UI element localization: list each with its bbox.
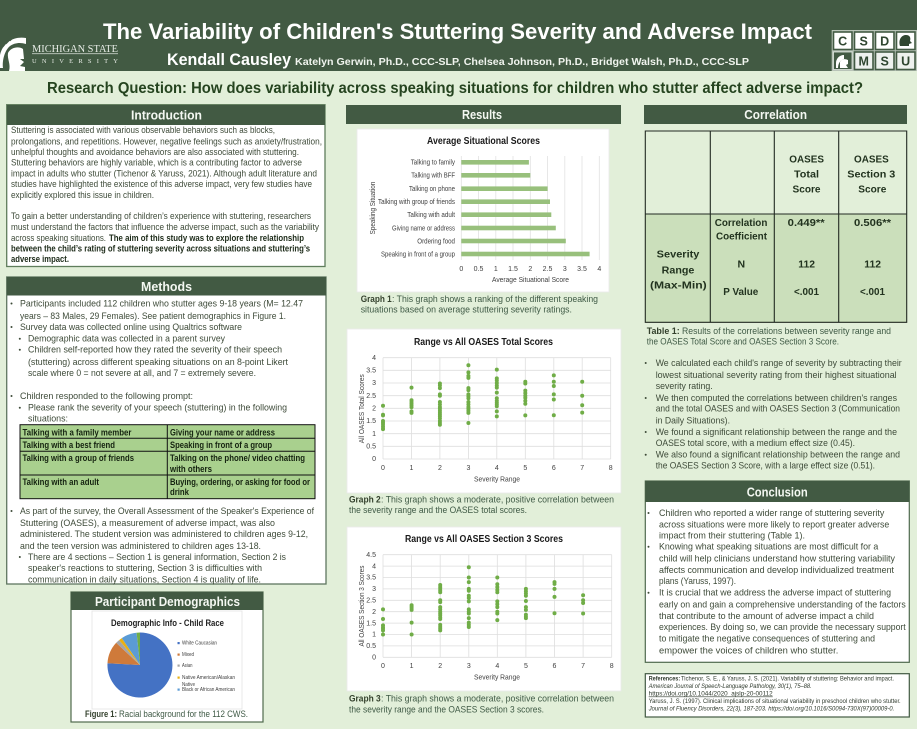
text block: conclusion bullets: Knowing what speaking situations are most difficult for a (659, 541, 879, 552)
logo: CSD MSU blocks: M (858, 54, 869, 68)
panel: references: Journal of Fluency Disorders, 22(3), 187-203. https://doi.org/10.1016/S0094-730X(97)00009-0. (648, 706, 894, 712)
scatter chart: range vs OASES section 3: 3 (372, 586, 376, 593)
pie legend: Native (182, 682, 195, 688)
panel: conclusion (645, 481, 909, 662)
text block: OASES description: There are 4 sections – Section 1 is general information, Section 2 is (28, 551, 286, 562)
text block: introduction body: To gain a better understanding of children’s experience with stuttering, researchers (11, 210, 311, 221)
text block: participants and survey (10, 298, 303, 424)
table: speaking situations: Talking with a family member (22, 427, 132, 437)
lead author: Kendall Causley (167, 50, 292, 69)
text block: introduction body: studies have highlighted the existence of this adverse impact, very few studies have (11, 178, 312, 189)
bar chart: average situational scores: 2.5 (543, 266, 552, 273)
heading: participant demographics: Participant Demographics (95, 595, 240, 609)
text block: introduction body: prolongations, and repetitions. However, negative feelings such as anxiety/frustration, (11, 135, 322, 146)
text block: correlation findings: the OASES Section 3 Score, with a large effect size (0.51). (656, 460, 875, 471)
scatter chart: range vs OASES section 3: Severity Range (474, 675, 520, 682)
pie legend: Black or African American (182, 687, 235, 693)
table: speaking situations: Talking with an adult (22, 477, 99, 487)
scatter chart: range vs OASES section 3: 5 (524, 663, 528, 670)
text block: conclusion bullets: child will help clinicians understand how stuttering variability (659, 553, 895, 564)
text block: introduction body: explicitly explored this issue in children. (11, 189, 154, 200)
table: speaking situations: with others (169, 464, 212, 474)
text block: participants and survey: Survey data was collected online using Qualtrics software (20, 321, 242, 332)
scatter chart: range vs OASES section 3: 0.5 (366, 643, 376, 650)
caption: figure 1: Racial background for the 112 CWS. (119, 708, 248, 719)
logo: CSD MSU blocks: C (838, 34, 847, 48)
scatter chart: range vs OASES section 3: All OASES Section 3 Scores (359, 565, 366, 646)
text block: conclusion bullets: impact from their stuttering (Table 1). (659, 529, 805, 540)
text block: correlation findings: We calculated each child's range of severity by subtracting their (656, 357, 902, 368)
scatter chart: range vs OASES section 3: 3.5 (366, 575, 376, 582)
scatter chart: range vs OASES section 3: 1 (410, 663, 414, 670)
table: speaking situations: Talking with a best friend (22, 440, 115, 450)
caption: graph 1: situations based on average stuttering severity ratings. (361, 304, 572, 315)
scatter chart: range vs OASES total: 6 (552, 465, 556, 472)
pie chart: child race (92, 611, 242, 709)
text block: conclusion bullets: affects communication and develop individualized treatment (659, 564, 894, 575)
text block: conclusion bullets: across situations were more likely to report greater adverse (659, 518, 889, 529)
text block: OASES description: As part of the survey, the Overall Assessment of the Speaker's Experience of (20, 505, 314, 516)
scatter chart: range vs OASES section 3: 2 (372, 609, 376, 616)
table: correlation results: <.001 (860, 286, 885, 298)
scatter chart: range vs OASES total: 8 (609, 465, 613, 472)
scatter chart: range vs OASES total: 4 (495, 465, 499, 472)
pie legend: Asian (182, 663, 193, 669)
heading: results: Results (462, 107, 502, 122)
logo: CSD MSU blocks: S (881, 54, 889, 68)
text block: correlation findings: We also found a significant relationship between the range and (656, 449, 900, 460)
scatter chart: range vs OASES section 3 (347, 527, 621, 691)
text block: participants and survey: Participants included 112 children who stutter ages 9-18 years (M= 12.47 (20, 298, 303, 309)
text block: participants and survey: years – 83 Males, 29 Females). See patient demographics in Figure 1. (20, 310, 286, 321)
text block: conclusion bullets: that contribute to the amount of adverse impact a child (659, 610, 874, 621)
header banner (0, 0, 917, 71)
caption: graph 2 (349, 494, 614, 515)
table: correlation results: 112 (864, 259, 881, 271)
text block: conclusion bullets (648, 507, 906, 655)
bar chart: average situational scores: 2 (528, 266, 532, 273)
table: correlation results: P Value (723, 286, 758, 298)
scatter chart: range vs OASES section 3: 4 (372, 563, 376, 570)
text block: introduction body: adverse impact. (11, 253, 69, 264)
scatter chart: range vs OASES total: 2.5 (366, 393, 376, 400)
bar chart: average situational scores: Giving name or address (392, 225, 455, 232)
scatter chart: range vs OASES total: 1 (410, 465, 414, 472)
pie legend: Mixed (182, 652, 194, 658)
bar chart: average situational scores: 4 (597, 266, 601, 273)
text block: OASES description: speaker's reactions to stuttering, Section 3 is difficulties with (28, 562, 262, 573)
text block: OASES description: communication in daily situations, Section 4 is quality of life. (28, 573, 261, 584)
panel: references: Yaruss, J. S. (1997). Clinical implications of situational variability in preschool children who stutter. (649, 698, 901, 705)
bar chart: average situational scores: 3.5 (577, 266, 587, 273)
scatter chart: range vs OASES section 3: 2.5 (366, 598, 376, 604)
scatter chart: range vs OASES section 3: 8 (610, 663, 614, 670)
table: speaking situations: Speaking in front of a group (170, 440, 273, 450)
panel: references (645, 674, 909, 717)
scatter chart: range vs OASES total (347, 329, 621, 493)
scatter chart: range vs OASES total: 3.5 (366, 368, 376, 374)
scatter chart: range vs OASES section 3: 4 (495, 663, 499, 670)
caption: table 1: Results of the correlations between severity range and (682, 325, 891, 336)
table: correlation results: 112 (798, 259, 815, 271)
panel: references: American Journal of Speech-Language Pathology, 30(1), 75–88. (648, 683, 812, 690)
text block: participants and survey: Demographic data was collected in a parent survey (28, 333, 225, 344)
table: speaking situations (20, 425, 315, 499)
text block: introduction body: between the child’s rating of stuttering severity across situations and stuttering’s (11, 242, 310, 254)
text block: correlation findings: in Daily Situations). (656, 415, 730, 426)
table: speaking situations: Buying, ordering, or asking for food or (170, 477, 310, 487)
text block: conclusion bullets: early on and gain a comprehensive understanding of the factors (659, 599, 906, 610)
table: speaking situations: Talking on the phone/ video chatting (170, 453, 305, 463)
table: correlation results: OASES (854, 153, 889, 165)
pie legend (178, 640, 235, 693)
table: speaking situations: drink (170, 487, 189, 497)
caption: graph 2: the severity range and the OASES total scores. (349, 504, 527, 515)
table: correlation results: 0.506** (854, 217, 892, 229)
table: correlation results: (Max-Min) (650, 279, 707, 291)
scatter chart: range vs OASES total: All OASES Total Scores (359, 374, 366, 443)
text block: OASES description: and the teen version was administered to children ages 13-18. (20, 540, 261, 551)
text block: conclusion bullets: plans (Yaruss, 1997). (659, 575, 736, 586)
panel: references: References: (649, 676, 680, 683)
text block: correlation findings: severity rating. (656, 380, 713, 391)
scatter chart: range vs OASES total: 3 (372, 380, 376, 387)
table: correlation results: OASES (789, 153, 824, 165)
heading: methods (7, 277, 326, 296)
scatter chart: range vs OASES section 3: 3 (467, 663, 471, 670)
text block: OASES description: administered. The student version was administered to children ages 9-12, (20, 528, 308, 539)
caption: figure 1: Figure 1: (85, 708, 117, 719)
scatter chart: range vs OASES total: 1.5 (366, 418, 376, 425)
heading: participant demographics (71, 592, 263, 610)
caption: table 1: Table 1: (647, 325, 680, 336)
caption: graph 3 (349, 693, 614, 715)
bar chart: average situational scores: Average Situational Score (492, 277, 569, 284)
heading: introduction (7, 105, 325, 125)
heading: conclusion (645, 481, 909, 502)
text block: OASES description (10, 505, 314, 584)
heading: correlation: Correlation (744, 107, 807, 122)
caption: table 1 (647, 325, 891, 346)
logo: Michigan State University: UNIVERSITY (32, 58, 118, 65)
text block: introduction body: unhelpful thoughts and avoidance behaviors are also associated with stuttering. (11, 146, 299, 157)
table: speaking situations: Giving your name or address (170, 427, 275, 437)
text block: introduction body: Stuttering is associated with various observable behaviors such as blocks, (11, 124, 275, 135)
table: correlation results: Total (794, 168, 819, 180)
text block: correlation findings (645, 357, 902, 471)
scatter chart: range vs OASES total: 1 (372, 431, 376, 438)
scatter chart: range vs OASES section 3: 7 (581, 663, 585, 670)
text block: correlation findings: lowest situational severity rating from their highest situational (656, 369, 897, 380)
text block: participants and survey: (stuttering) across different speaking situations on an 8-point Likert (28, 356, 288, 367)
table: correlation results: Coefficient (716, 231, 767, 243)
bar chart: average situational scores: Talking with adult (407, 212, 455, 219)
logo: CSD MSU blocks: D (880, 34, 889, 48)
text block: conclusion bullets: Children who reported a wider range of stuttering severity (659, 507, 885, 518)
scatter chart: range vs OASES section 3: Range vs All OASES Section 3 Scores (405, 534, 563, 545)
scatter chart: range vs OASES total: 4 (372, 355, 376, 362)
table: correlation results: Severity (657, 248, 700, 260)
bar chart: average situational scores: 0 (459, 266, 463, 273)
table: correlation results (645, 131, 907, 322)
caption: graph 2: : This graph shows a moderate, positive correlation between (381, 494, 614, 505)
text block: correlation findings: OASES total score, with a medium effect size (0.45). (656, 437, 855, 448)
scatter chart: range vs OASES total: 3 (466, 465, 470, 472)
caption: graph 1: : This graph shows a ranking of the different speaking (392, 293, 598, 304)
heading: methods: Methods (141, 279, 192, 294)
bar chart: average situational scores: 1 (494, 266, 498, 273)
text block: participants and survey: Children responded to the following prompt: (20, 390, 193, 401)
caption: table 1: the OASES Total Score and OASES Section 3 Score. (647, 335, 839, 346)
text block: participants and survey: Please rank the severity of your speech (stuttering) in the following (28, 402, 287, 413)
scatter chart: range vs OASES section 3: 6 (553, 663, 557, 670)
scatter chart: range vs OASES section 3: 0 (381, 663, 385, 670)
table: speaking situations: Talking with a group of friends (22, 453, 134, 463)
table: correlation results: Correlation (715, 217, 767, 229)
bar chart: average situational scores: Speaking Situation (370, 182, 377, 234)
title: The Variability of Children's Stuttering Severity and Adverse Impact (103, 19, 813, 44)
scatter chart: range vs OASES total: 7 (580, 465, 584, 472)
panel: introduction (7, 105, 325, 266)
scatter chart: range vs OASES total: 0 (381, 465, 385, 472)
table: correlation results: Section 3 (847, 168, 895, 180)
panel: participant demographics (71, 592, 263, 722)
text block: conclusion bullets: It is crucial that we address the adverse impact of stuttering (659, 587, 891, 598)
table: correlation results: Score (792, 183, 821, 195)
heading: results (346, 105, 621, 124)
co-authors: Katelyn Gerwin, Ph.D., CCC-SLP, Chelsea Johnson, Ph.D., Bridget Walsh, Ph.D., CCC-SLP (295, 56, 749, 68)
text block: introduction body: Stuttering behaviors are highly variable, which is a contributing factor to adverse (11, 156, 302, 168)
text block: introduction body (11, 124, 322, 264)
text block: conclusion bullets: empower the voices of children who stutter. (659, 644, 838, 655)
caption: graph 3: Graph 3 (349, 693, 381, 704)
panel: references: Tichenor, S. E., & Yaruss, J. S. (2021). Variability of stuttering: Behavior and impact. (681, 676, 894, 683)
logo: CSD MSU blocks: U (901, 54, 910, 68)
caption: graph 3: : This graph shows a moderate, positive correlation between (381, 693, 614, 704)
scatter chart: range vs OASES total: 0.5 (366, 444, 376, 450)
bar chart: average situational scores: Average Situational Scores (427, 136, 540, 147)
logo: Michigan State University (0, 38, 118, 71)
bar chart: average situational scores (357, 129, 609, 292)
table: correlation results: Range (662, 264, 695, 276)
table: correlation results: 0.449** (788, 217, 826, 229)
scatter chart: range vs OASES total: Severity Range (474, 477, 520, 484)
bar chart: average situational scores: 3 (563, 266, 567, 273)
panel: methods (7, 277, 326, 584)
text block: introduction body: must understand the factors that influence the adverse impact, such as the variability (11, 221, 319, 232)
text block: participants and survey: scale where 0 = not severe at all, and 7 = extremely severe. (28, 367, 256, 378)
heading: correlation (644, 105, 907, 124)
logo: CSD MSU blocks: S (860, 34, 868, 48)
bar chart: average situational scores: Speaking in front of a group (381, 251, 455, 258)
text block: participants and survey: situations: (28, 413, 68, 424)
logo: CSD MSU blocks (832, 30, 917, 71)
pie legend: White Caucasian (182, 640, 217, 646)
pie chart: child race: Demographic Info - Child Race (111, 618, 224, 628)
scatter chart: range vs OASES section 3: 0 (372, 654, 376, 662)
logo: Michigan State University: MICHIGAN STATE (32, 44, 118, 55)
text block: participants and survey: Children self-reported how they rated the severity of their speech (28, 344, 282, 355)
scatter chart: range vs OASES section 3: 4.5 (366, 552, 376, 559)
bar chart: average situational scores: 0.5 (474, 266, 483, 273)
bar chart: average situational scores: Talking to family (411, 160, 455, 167)
caption: graph 1 (361, 293, 598, 315)
heading: introduction: Introduction (131, 108, 202, 122)
heading: conclusion: Conclusion (747, 485, 808, 500)
bar chart: average situational scores: Ordering food (417, 238, 455, 245)
caption: graph 1: Graph 1 (361, 293, 392, 304)
text block: introduction body: The aim of this study was to explore the relationship (109, 232, 304, 243)
text block: introduction body: across speaking situations. (11, 232, 106, 243)
pie legend: Native American/Alaskan (182, 675, 235, 681)
caption: figure 1 (85, 708, 248, 719)
scatter chart: range vs OASES section 3: 1.5 (366, 620, 376, 627)
caption: graph 3: the severity range and the OASES Section 3 scores. (349, 704, 544, 715)
text block: conclusion bullets: to mitigate the negative consequences of stuttering and (659, 632, 875, 643)
bar chart: average situational scores: 1.5 (508, 266, 518, 273)
text block: OASES description: Stuttering (OASES), a measurement of adverse impact, was also (20, 517, 275, 528)
bar chart: average situational scores: Talking with BFF (411, 173, 455, 180)
scatter chart: range vs OASES total: 2 (372, 406, 376, 412)
scatter chart: range vs OASES total: 0 (372, 456, 376, 463)
bar chart: average situational scores: Talking on phone (409, 186, 455, 193)
scatter chart: range vs OASES section 3: 1 (372, 632, 376, 639)
table: correlation results: <.001 (794, 286, 819, 298)
caption: graph 2: Graph 2 (349, 494, 381, 505)
text block: correlation findings: We then computed the correlations between children's ranges (656, 392, 897, 403)
scatter chart: range vs OASES total: Range vs All OASES Total Scores (414, 337, 553, 348)
scatter chart: range vs OASES section 3: 2 (438, 663, 442, 670)
research question: Research Question: How does variability across speaking situations for children who stutter affect adverse impact? (47, 80, 863, 97)
scatter chart: range vs OASES total: 5 (523, 465, 527, 472)
text block: correlation findings: We found a significant relationship between the range and the (656, 426, 897, 437)
table: correlation results: Score (858, 183, 886, 195)
panel: references: https://doi.org/10.1044/2020_ajslp-20-00112 (649, 690, 773, 698)
scatter chart: range vs OASES total: 2 (438, 465, 442, 472)
text block: introduction body: impact in adults who stutter (Tichenor & Yaruss, 2021). Although adult literature and (11, 168, 317, 178)
table: correlation results: N (738, 259, 745, 271)
bar chart: average situational scores: Talking with group of friends (378, 199, 455, 206)
